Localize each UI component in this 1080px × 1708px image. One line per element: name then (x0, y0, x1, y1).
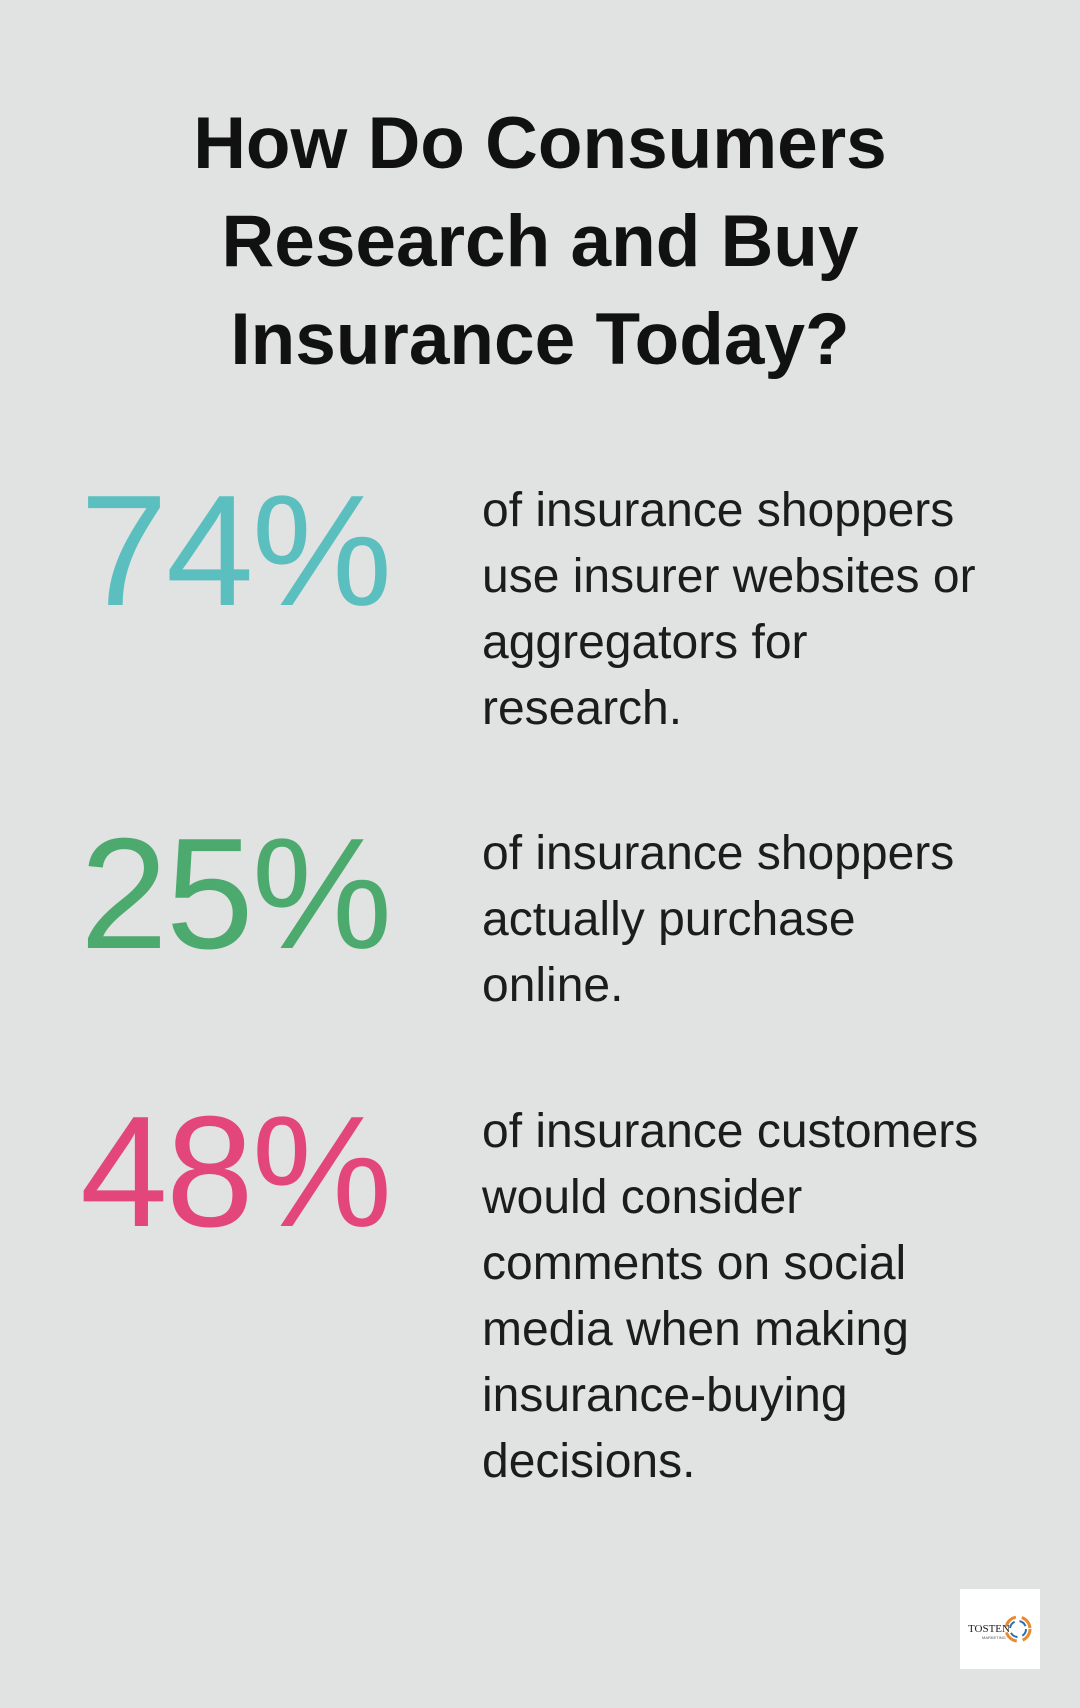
text: 48% description: insurance-buying (482, 1369, 848, 1422)
title: How Do Consumers (193, 103, 887, 184)
logo: TOSTEN (968, 1623, 1010, 1635)
text: 48% description (482, 1105, 978, 1488)
text: 25% description (482, 827, 954, 1012)
text: 48% description: of insurance customers (482, 1105, 978, 1158)
logo (960, 1589, 1040, 1669)
text: 48% description: would consider (482, 1171, 802, 1224)
text: 25% description: actually purchase (482, 893, 856, 946)
title: Insurance Today? (230, 299, 850, 380)
text: 25% description: of insurance shoppers (482, 827, 954, 880)
text: 48% description: decisions. (482, 1435, 695, 1488)
text: 74% description: aggregators for (482, 616, 808, 669)
text: 74% description: of insurance shoppers (482, 484, 954, 537)
title (193, 103, 887, 380)
text: 48% description: comments on social (482, 1237, 906, 1290)
text: 74% description (482, 484, 976, 735)
title: Research and Buy (222, 201, 858, 282)
stat: 25%: 25% (80, 806, 390, 982)
text: 25% description: online. (482, 959, 623, 1012)
text: 74% description: research. (482, 682, 682, 735)
logo: MARKETING (982, 1635, 1006, 1640)
text: 48% description: media when making (482, 1303, 909, 1356)
stat: 74%: 74% (80, 463, 390, 639)
text: 74% description: use insurer websites or (482, 550, 976, 603)
stat: 48%: 48% (80, 1084, 390, 1260)
